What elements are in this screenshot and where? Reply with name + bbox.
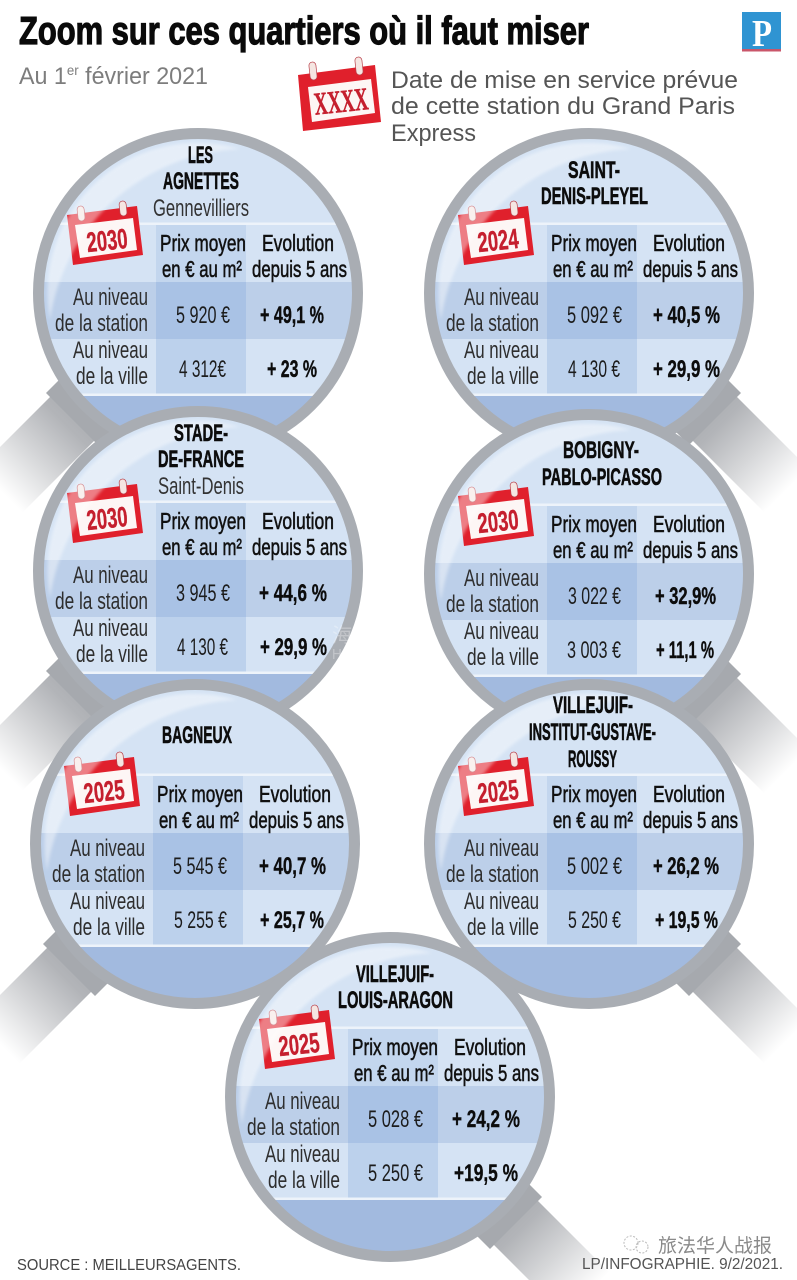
lens: Les Agnettes: Gennevilliers [153,195,249,222]
lens: Villejuif-Louis-Aragon: 5 250 € [368,1160,423,1187]
lens: Saint-Denis-Pleyel [430,134,797,545]
lens: Bagneux: BAGNEUX [162,722,232,749]
lens: Bobigny-Pablo-Picasso: + 11,1 % [656,637,714,664]
lens: Stade-de-France: Saint-Denis [158,473,244,500]
lens: Les Agnettes: + 23 % [267,356,317,383]
lens: Bagneux: 5 255 € [174,907,227,934]
lens: Saint-Denis-Pleyel: DENIS-PLEYEL [541,183,648,210]
lens: Villejuif-Louis-Aragon: LOUIS-ARAGON [338,987,453,1014]
lens: Villejuif-Institut-Gustave-Roussy: 5 002 € [567,853,622,880]
lens: Stade-de-France [0,412,360,816]
lens: Bagneux: + 25,7 % [260,907,324,934]
lens: Bagneux: + 40,7 % [259,853,326,880]
lens: Villejuif-Institut-Gustave-Roussy: ROUSSY [568,746,617,773]
lens: Villejuif-Louis-Aragon: VILLEJUIF- [356,961,434,988]
lens: Villejuif-Institut-Gustave-Roussy: 5 250 € [568,907,621,934]
lens: Bagneux: 5 545 € [173,853,227,880]
lens: Bobigny-Pablo-Picasso: 2030 [476,504,520,539]
lens: Villejuif-Louis-Aragon: + 24,2 % [452,1106,520,1133]
lens: Bobigny-Pablo-Picasso: PABLO-PICASSO [542,464,662,491]
lens: Stade-de-France: + 29,9 % [260,634,327,661]
date subtitle: Au 1 [19,63,69,90]
date subtitle: er [67,62,79,78]
lens: Villejuif-Louis-Aragon: +19,5 % [454,1160,518,1187]
watermark: Hainabian: Hainabian [332,646,393,663]
legend text: Express [391,120,476,147]
lens: Villejuif-Institut-Gustave-Roussy [430,684,797,1096]
lens: Villejuif-Institut-Gustave-Roussy: VILLEJUIF- [553,692,633,719]
lens: Bobigny-Pablo-Picasso [430,414,797,826]
lens: Bobigny-Pablo-Picasso: + 32,9% [655,583,716,610]
lens: Stade-de-France: STADE- [174,420,228,447]
logo: Le Parisien [742,12,781,55]
title: Zoom sur ces quartiers où il faut miser [19,10,589,53]
watermark: WeChat account: 旅法华人战报 [658,1231,772,1258]
legend text: de cette station du Grand Paris [391,93,735,120]
lens: Saint-Denis-Pleyel: 4 130 € [568,356,620,383]
lens: Saint-Denis-Pleyel: + 40,5 % [653,302,720,329]
legend text [391,67,738,147]
lens: Bobigny-Pablo-Picasso: BOBIGNY- [563,437,639,464]
date subtitle: février 2021 [79,63,208,90]
lens: Villejuif-Louis-Aragon [230,938,617,1280]
lens: Les Agnettes: 2030 [85,223,129,258]
watermark: Hainabian [332,619,393,663]
lens: Bagneux: 2025 [82,774,126,809]
legend: calendar icon [298,57,381,131]
lens: Saint-Denis-Pleyel: + 29,9 % [653,356,720,383]
logo: Le Parisien: P [752,13,772,55]
lens: Stade-de-France: 2030 [85,501,129,536]
lens: Villejuif-Institut-Gustave-Roussy: INSTITUT-GUSTAVE- [529,719,656,746]
lens: Saint-Denis-Pleyel: 5 092 € [567,302,622,329]
lens: Bagneux [0,684,357,1089]
lens: Les Agnettes: 4 312€ [179,356,226,383]
lens: Les Agnettes: + 49,1 % [260,302,324,329]
lens: Les Agnettes: LES [188,142,213,169]
lens: Les Agnettes: AGNETTES [163,168,239,195]
lens: Les Agnettes: 5 920 € [176,302,230,329]
lens: Saint-Denis-Pleyel: SAINT- [568,157,620,184]
watermark: Hainabian: 海那边 [332,619,393,648]
lens: Stade-de-France: DE-FRANCE [158,446,244,473]
lens: Stade-de-France: 3 945 € [176,580,230,607]
lens: Villejuif-Institut-Gustave-Roussy: 2025 [476,774,520,809]
lens: Villejuif-Louis-Aragon: 2025 [277,1027,321,1062]
lens: Villejuif-Louis-Aragon: 5 028 € [368,1106,423,1133]
legend text: Date de mise en service prévue [391,67,738,94]
lens: Villejuif-Institut-Gustave-Roussy: + 19,5 % [655,907,718,934]
lens: Villejuif-Institut-Gustave-Roussy: + 26,2 % [653,853,719,880]
source: SOURCE : MEILLEURSAGENTS. [17,1257,241,1274]
lens: Stade-de-France: 4 130 € [177,634,228,661]
legend: calendar icon: XXXX [312,80,370,122]
lens: Saint-Denis-Pleyel: 2024 [476,223,520,258]
lens: Bobigny-Pablo-Picasso: 3 022 € [568,583,621,610]
lens: Stade-de-France: + 44,6 % [259,580,327,607]
lens: Bobigny-Pablo-Picasso: 3 003 € [567,637,621,664]
credit: LP/INFOGRAPHIE. 9/2/2021. [582,1256,783,1273]
lens: Les Agnettes [0,134,360,538]
